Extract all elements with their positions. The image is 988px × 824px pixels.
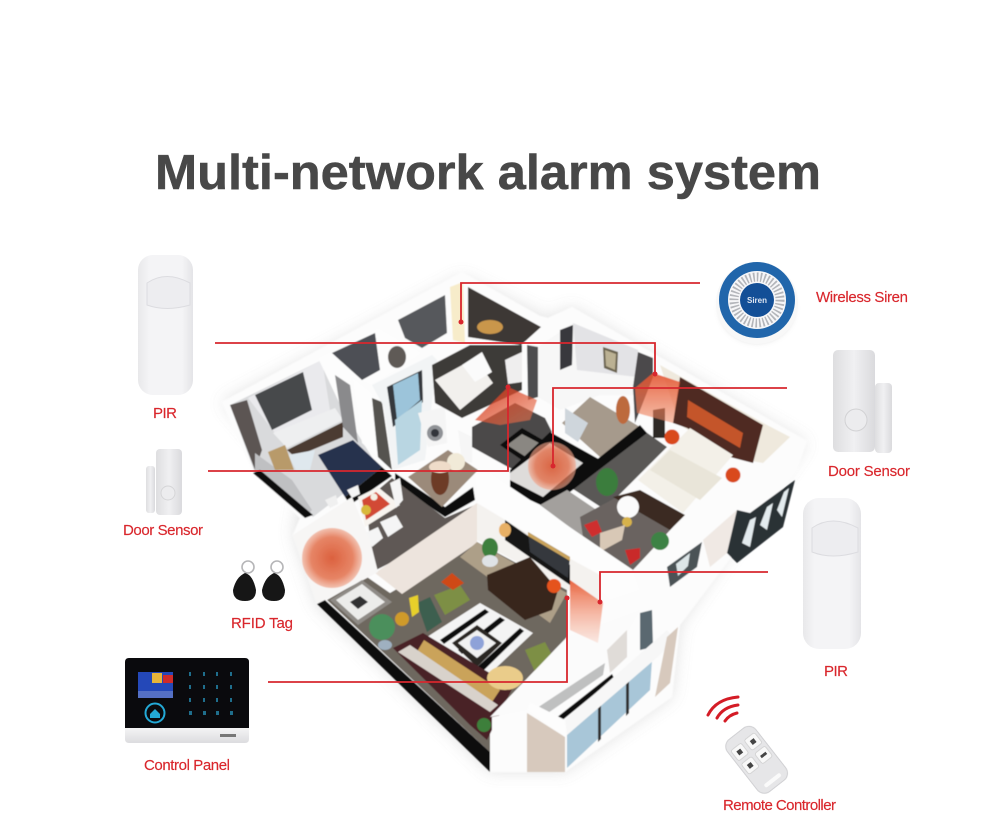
connector line: left door sensor (208, 384, 510, 471)
room: master bedroom (510, 365, 790, 570)
connector line: control panel (268, 596, 570, 682)
device: left door sensor (146, 449, 182, 515)
exterior wall and windows right side (667, 480, 795, 587)
room: upper right bath (527, 323, 653, 457)
label: Control Panel: Control Panel (144, 757, 230, 774)
connector line: wireless siren (458, 283, 700, 324)
room: kitchen upper left (230, 360, 392, 518)
room: bathroom partition and shower (318, 328, 447, 470)
icon: wireless signal arcs (708, 697, 738, 721)
panel keypad (189, 672, 233, 715)
device: remote controller (722, 723, 791, 797)
sub: armchairs and cushions (369, 573, 552, 672)
balcony (490, 610, 678, 772)
device: right door sensor (833, 350, 892, 453)
label: Remote Controller: Remote Controller (723, 797, 836, 814)
label: PIR right: PIR (824, 663, 848, 680)
device: control panel (125, 658, 249, 743)
connector line: right door sensor (550, 388, 787, 468)
title: Multi-network alarm system (155, 146, 821, 200)
motion detection zones (302, 373, 680, 643)
device: RFID tags (233, 561, 285, 601)
label: RFID Tag: RFID Tag (231, 615, 293, 632)
sub: sofa (393, 633, 523, 740)
connector line: right PIR (598, 572, 768, 604)
label: Wireless Siren: Wireless Siren (816, 289, 908, 306)
connector line: upper PIR (215, 343, 658, 376)
room: upper bedroom (398, 282, 541, 418)
label: PIR left: PIR (153, 405, 177, 422)
isometric floor plan (222, 272, 807, 772)
device: left PIR sensor (138, 255, 193, 395)
sub: white partition and TV wall (475, 473, 640, 600)
room: central hall and tan carpet (395, 403, 552, 517)
room: dining area (325, 478, 475, 570)
panel screen (138, 672, 173, 698)
siren text: Siren (747, 296, 767, 305)
device: wireless siren (716, 262, 798, 344)
room: living room (293, 473, 640, 772)
label: Door Sensor left: Door Sensor (123, 522, 203, 539)
sub: zebra rug (427, 603, 533, 683)
label: Door Sensor right: Door Sensor (828, 463, 910, 480)
device: right PIR sensor (803, 498, 861, 649)
